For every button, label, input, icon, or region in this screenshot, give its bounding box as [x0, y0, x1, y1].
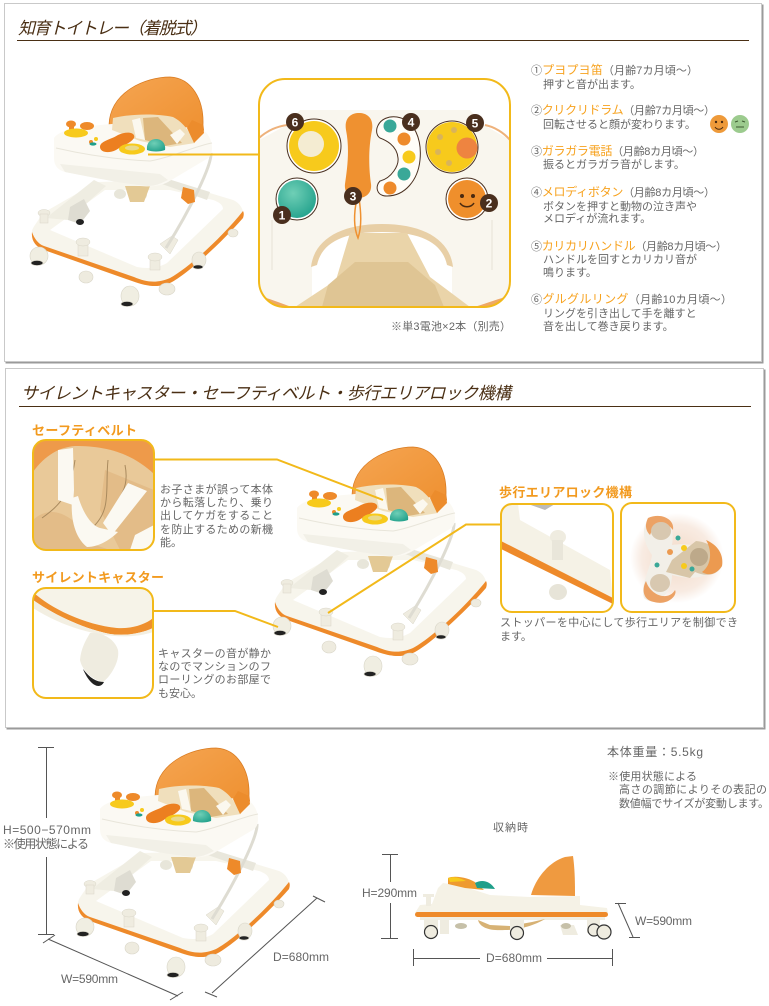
toy 2: drum face: [446, 178, 488, 220]
number badges: 4: [408, 116, 415, 130]
dimension labels: H=500−570mm: [3, 823, 91, 837]
photo: stopper: [501, 504, 613, 612]
feature list: ①プヨプヨ笛（月齢7カ月頃～）: [531, 62, 698, 77]
walker photo: [30, 77, 244, 306]
text: silent caster: も安心。: [158, 687, 202, 700]
number badges: 2: [486, 196, 493, 210]
tray close-up: [259, 79, 510, 307]
number badges: 6: [292, 116, 299, 130]
icon: drum faces: [710, 115, 749, 133]
feature list: リングを引き出して手を離すと: [543, 306, 697, 320]
text: silent caster: ローリングのお部屋で: [158, 672, 271, 686]
photo: caster: [33, 588, 153, 698]
dimension labels: W=590mm: [61, 972, 118, 986]
toy 5: handle wheel: [426, 121, 478, 173]
folded walker: [415, 856, 611, 940]
connector line: [148, 154, 259, 156]
battery note: ※単3電池×2本（別売）: [391, 319, 511, 333]
folded label: 収納時: [493, 820, 528, 834]
feature list: 音を出して巻き戻ります。: [543, 319, 674, 333]
text: safety belt: 能。: [160, 535, 182, 549]
text: safety belt: から転落したり、乗り: [160, 496, 273, 509]
feature list: メロディが流れます。: [543, 211, 651, 225]
spec notes: ※使用状態による: [608, 769, 697, 783]
safety belt callout: セーフティベルト: [32, 423, 137, 438]
spec notes: 数値幅でサイズが変動します。: [619, 796, 769, 810]
panel: caster, belt and area lock: [6, 368, 766, 730]
dimension labels: ※使用状態による: [3, 836, 89, 851]
number badges: 3: [350, 190, 357, 204]
heading: toy tray: 知育トイトレー（着脱式）: [18, 19, 207, 38]
toy 6: ring: [287, 119, 341, 173]
feature list: ②クリクリドラム（月齢7カ月頃～）: [531, 103, 715, 117]
feature list: ハンドルを回すとカリカリ音が: [543, 252, 697, 266]
walker photo: [76, 748, 290, 978]
text: safety belt: [160, 482, 273, 549]
section: folded dimensions: [362, 820, 692, 966]
text: silent caster: [158, 646, 271, 700]
text: area lock: [500, 615, 738, 643]
feature list: 押すと音が出ます。: [543, 77, 641, 91]
photo: lock mechanism: [621, 503, 735, 612]
feature list: ボタンを押すと動物の泣き声や: [543, 199, 697, 213]
text: area lock: ストッパーを中心にして歩行エリアを制御でき: [500, 615, 738, 629]
folded dimension labels: W=590mm: [635, 914, 692, 928]
heading: caster, belt, area lock: サイレントキャスター・セーフティベルト・歩行エリアロック機構: [21, 384, 514, 403]
area lock callout: [499, 485, 738, 643]
folded dimension labels: D=680mm: [486, 951, 542, 965]
silent caster callout: サイレントキャスター: [32, 570, 164, 585]
feature list: 回転させると顔が変わります。: [543, 117, 696, 131]
number badges: 5: [472, 116, 479, 130]
dimension lines: [38, 747, 325, 1000]
walker photo: [273, 447, 487, 676]
text: safety belt: を防止するための新機: [160, 522, 273, 536]
feature list: ⑥グルグルリング（月齢10カ月頃～）: [531, 292, 732, 306]
number badges: [273, 113, 498, 224]
folded dimension labels: H=290mm: [362, 886, 417, 900]
folded dimension labels: [362, 886, 692, 965]
feature list: [531, 62, 732, 333]
spec notes: 高さの調節によりその表記の: [619, 782, 767, 796]
text: silent caster: キャスターの音が静か: [158, 646, 271, 660]
safety belt callout: [32, 423, 273, 550]
feature list: ③ガラガラ電話（月齢8カ月頃～）: [531, 144, 704, 158]
connector lines: [153, 460, 501, 627]
text: silent caster: なのでマンションのフ: [158, 660, 271, 673]
spec notes: [607, 745, 769, 810]
folded dimension lines: [381, 854, 640, 966]
toy 3: rattle phone: [345, 113, 372, 238]
feature list: 鳴ります。: [543, 265, 597, 279]
text: safety belt: お子さまが誤って本体: [160, 482, 273, 496]
area lock callout: 歩行エリアロック機構: [499, 485, 632, 500]
feature list: ④メロディボタン（月齢8カ月頃～）: [531, 184, 715, 199]
toy 1: teal ball: [276, 178, 318, 220]
dimension labels: D=680mm: [273, 950, 329, 964]
text: area lock: ます。: [500, 630, 532, 643]
number badges: 1: [279, 208, 286, 222]
spec notes: 本体重量：5.5kg: [607, 745, 703, 759]
silent caster callout: [32, 570, 271, 700]
feature list: ⑤カリカリハンドル（月齢8カ月頃～）: [531, 239, 727, 253]
text: safety belt: 出してケガをすること: [160, 509, 273, 522]
section: dimensions in use: [3, 747, 329, 1000]
toy 4: melody buttons: [377, 117, 420, 196]
feature list: 振るとガラガラ音がします。: [543, 157, 685, 171]
panel: educational toy tray: [4, 4, 764, 364]
dimension labels: [3, 823, 329, 986]
photo: safety belt: [33, 440, 154, 550]
